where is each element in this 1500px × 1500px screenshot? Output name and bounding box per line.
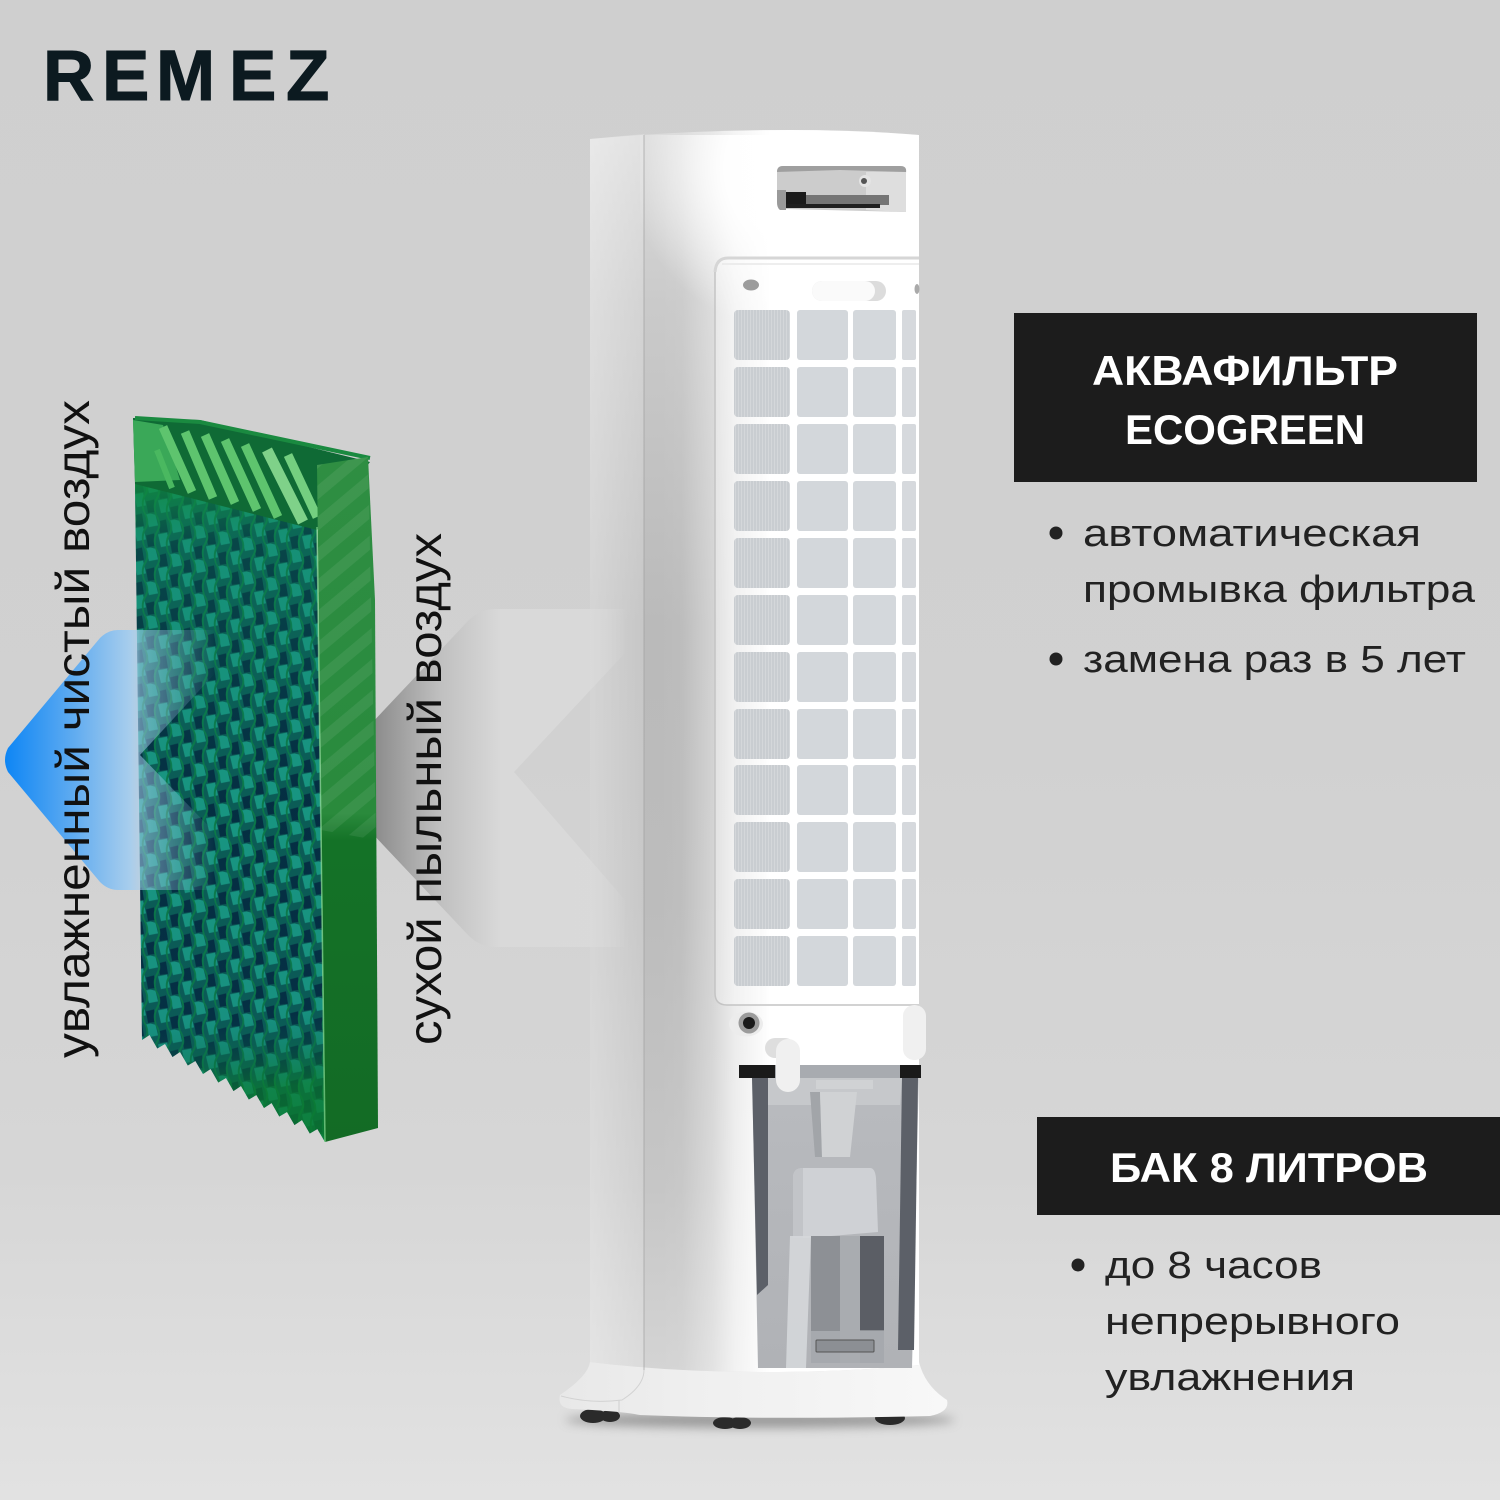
body [590, 130, 919, 1372]
bullet list: tank: увлажнения [1105, 1357, 1355, 1399]
filter cartridge [133, 418, 378, 1142]
filter side face [317, 457, 378, 1142]
bullet list: filter: автоматическая [1083, 513, 1421, 555]
product: air cooler tower [560, 130, 955, 1429]
filter front honeycomb face [135, 482, 325, 1142]
bullet list: tank [1072, 1245, 1400, 1399]
heading box: aquafilter [1014, 313, 1477, 482]
heading text: БАК 8 ЛИТРОВ [1110, 1144, 1428, 1191]
floor shadow [565, 1412, 955, 1428]
filter top with stripes [133, 418, 370, 530]
wheels [580, 1409, 905, 1429]
bullet list: tank: до 8 часов [1105, 1245, 1322, 1287]
heading box: aquafilter: ECOGREEN [1125, 406, 1365, 453]
base [560, 1362, 947, 1418]
bullet list: filter: замена раз в 5 лет [1083, 639, 1466, 681]
bullet list: filter: промывка фильтра [1083, 569, 1476, 611]
label: humidified clean air: увлажненный чистый воздух [47, 400, 99, 1058]
heading text: АКВАФИЛЬТР [1092, 347, 1398, 394]
heading box: tank 8 litres [1037, 1117, 1500, 1215]
water tank [739, 1065, 921, 1368]
bullet list: filter [1050, 513, 1476, 681]
tank latch right [903, 1005, 926, 1060]
right edge screw [914, 284, 920, 294]
logo: REMEZ: REMEZ [43, 37, 329, 116]
panel sensor [743, 280, 759, 290]
jack socket [729, 1012, 763, 1036]
top window [777, 166, 906, 212]
label: dry dusty air: сухой пыльный воздух [399, 533, 451, 1045]
filter panel [715, 258, 920, 1005]
tank latch left [765, 1038, 800, 1092]
grille [734, 310, 916, 986]
panel handle [812, 281, 886, 301]
arrow: dry dusty air going in [320, 609, 625, 947]
bullet list: tank: непрерывного [1105, 1301, 1400, 1343]
arrow: humidified clean air going out [5, 630, 220, 890]
